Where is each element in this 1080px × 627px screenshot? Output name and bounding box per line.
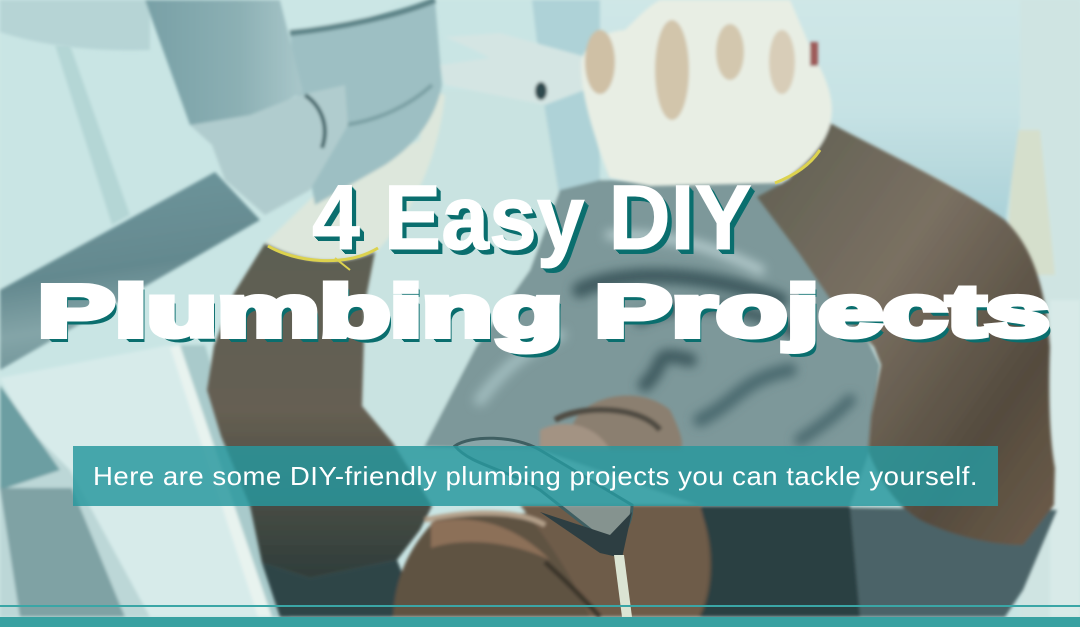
bottom thin rule (0, 605, 1080, 607)
glove cuffs (268, 150, 820, 270)
sink bowl (290, 0, 442, 205)
left glove (265, 90, 445, 261)
shirt folds (480, 235, 850, 440)
title line 1: 4 Easy DIY (312, 167, 752, 269)
shirt lower dark (700, 506, 1057, 617)
lower left pipe (0, 400, 150, 617)
right glove (581, 0, 832, 186)
subtitle banner (73, 446, 998, 506)
pipes (145, 0, 303, 125)
right arm (757, 123, 1055, 545)
bottom teal band (0, 617, 1080, 627)
upper basin rim (0, 0, 150, 50)
jeans (590, 0, 1020, 225)
title line 2: Plumbing Projects (38, 272, 1049, 352)
subtitle banner: Here are some DIY-friendly plumbing projects you can tackle yourself. (93, 461, 978, 491)
glasses (455, 438, 632, 617)
left forearm (207, 243, 432, 578)
shirt (424, 180, 880, 506)
face (393, 510, 711, 617)
wrench (440, 33, 590, 105)
